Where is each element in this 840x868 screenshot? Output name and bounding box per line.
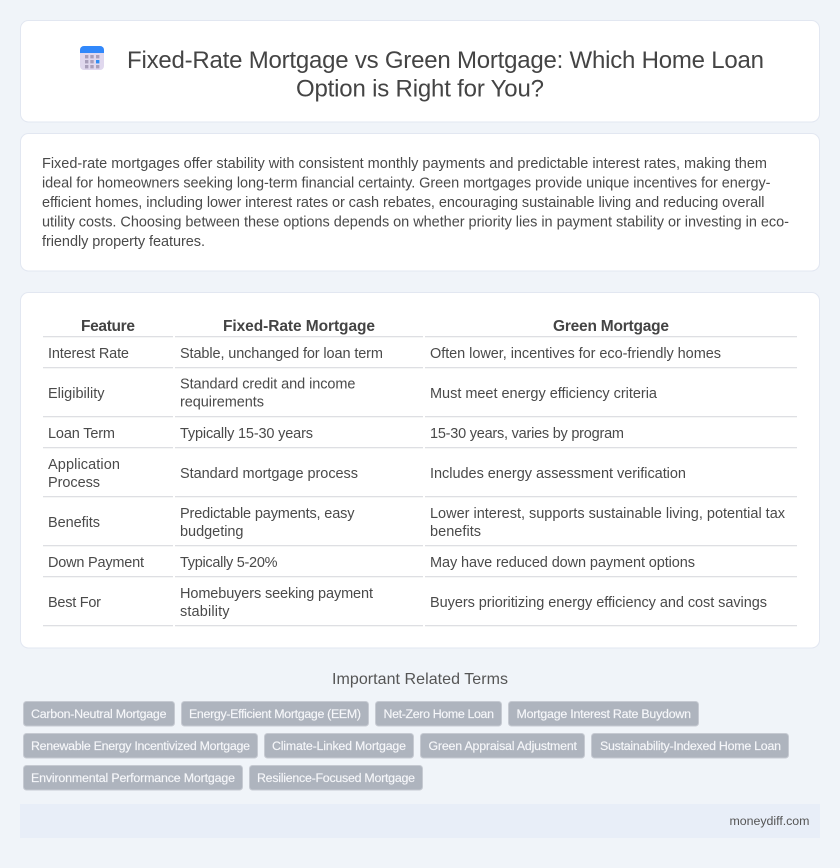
row: application process: Process — [48, 475, 100, 491]
text block: introduction paragraph: Fixed-rate mortgages offer stability with consistent monthly payments and predictable interest rates, making them — [42, 156, 767, 172]
row: loan term: Loan Term — [48, 426, 115, 442]
tag: resilience-focused mortgage: Resilience-Focused Mortgage — [257, 771, 415, 785]
table header row: Fixed-Rate Mortgage — [223, 318, 375, 335]
tag: resilience-focused mortgage — [250, 766, 422, 790]
row: interest rate: Often lower, incentives for eco-friendly homes — [430, 346, 721, 362]
title — [127, 47, 764, 102]
row: application process: Includes energy assessment verification — [430, 466, 686, 482]
row: application process: Standard mortgage process — [180, 466, 358, 482]
row: benefits — [48, 506, 786, 540]
icon: calendar — [80, 46, 104, 70]
title: Option is Right for You? — [296, 76, 544, 102]
tag: mortgage interest rate buydown: Mortgage Interest Rate Buydown — [516, 707, 691, 721]
row: loan term: Typically 15-30 years — [180, 426, 313, 442]
row: down payment: Down Payment — [48, 555, 144, 571]
row: eligibility: requirements — [180, 394, 264, 410]
panel: introduction — [20, 134, 820, 271]
row: down payment — [48, 555, 695, 571]
tag: environmental performance mortgage: Environmental Performance Mortgage — [31, 771, 235, 785]
text block: introduction paragraph — [42, 156, 789, 250]
row: best for: stability — [180, 604, 230, 620]
tag: energy-efficient mortgage — [182, 702, 368, 726]
row: benefits: budgeting — [180, 524, 244, 540]
tag: sustainability-indexed home loan — [592, 734, 788, 758]
tag: climate-linked mortgage: Climate-Linked Mortgage — [272, 739, 406, 753]
row: eligibility — [48, 376, 658, 410]
tag list: related terms — [24, 702, 788, 790]
row: loan term: 15-30 years, varies by program — [430, 426, 624, 442]
tag: renewable energy incentivized mortgage — [24, 734, 258, 758]
table header row: Green Mortgage — [553, 318, 669, 335]
row: eligibility: Must meet energy efficiency criteria — [430, 386, 658, 402]
row: application process: Application — [48, 457, 120, 473]
table header row — [81, 318, 669, 335]
row: best for: Best For — [48, 595, 101, 611]
row: benefits: Lower interest, supports sustainable living, potential tax — [430, 506, 786, 522]
panel: comparison table — [20, 292, 820, 648]
tag: green appraisal adjustment — [420, 734, 584, 758]
row: interest rate: Interest Rate — [48, 346, 129, 362]
tag: sustainability-indexed home loan: Sustainability-Indexed Home Loan — [600, 739, 781, 753]
row: interest rate: Stable, unchanged for loan term — [180, 346, 383, 362]
text block: introduction paragraph: ideal for homeowners seeking long-term financial certainty. Green mortgages provide unique incentives for energy- — [42, 176, 771, 192]
row: loan term — [48, 426, 624, 442]
tag: net-zero home loan — [376, 702, 502, 726]
row: down payment: May have reduced down payment options — [430, 555, 695, 571]
text block: introduction paragraph: utility costs. Choosing between these options depends on whether priority lies in payment stability or investing in eco- — [42, 214, 789, 230]
row: best for: Buyers prioritizing energy efficiency and cost savings — [430, 595, 767, 611]
row: benefits: Predictable payments, easy — [180, 506, 355, 522]
row: best for: Homebuyers seeking payment — [180, 586, 373, 602]
panel: title card — [20, 20, 820, 122]
row: benefits: Benefits — [48, 515, 100, 531]
row: down payment: Typically 5-20% — [180, 555, 278, 571]
tag: net-zero home loan: Net-Zero Home Loan — [384, 707, 494, 721]
tag: mortgage interest rate buydown — [508, 702, 698, 726]
text block: introduction paragraph: efficient homes, including lower interest rates or cash rebates, encouraging sustainable living and reducing overall — [42, 195, 764, 211]
tag: energy-efficient mortgage: Energy-Efficient Mortgage (EEM) — [189, 707, 361, 721]
text block: introduction paragraph: friendly property features. — [42, 234, 205, 250]
tag: green appraisal adjustment: Green Appraisal Adjustment — [428, 739, 578, 753]
title: Fixed-Rate Mortgage vs Green Mortgage: Which Home Loan — [127, 47, 764, 74]
tag: climate-linked mortgage — [264, 734, 414, 758]
row: application process — [48, 457, 686, 491]
tag: carbon-neutral mortgage: Carbon-Neutral Mortgage — [31, 707, 167, 721]
tag: carbon-neutral mortgage — [24, 702, 174, 726]
row: benefits: benefits — [430, 524, 481, 540]
tag: environmental performance mortgage — [24, 766, 242, 790]
tag: renewable energy incentivized mortgage: Renewable Energy Incentivized Mortgage — [31, 739, 250, 753]
row: eligibility: Standard credit and income — [180, 376, 356, 392]
row: interest rate — [48, 346, 721, 362]
footer: moneydiff.com — [730, 814, 810, 828]
row: best for — [48, 586, 767, 620]
footer — [20, 804, 820, 838]
heading: important related terms: Important Related Terms — [332, 671, 508, 688]
table header row: Feature — [81, 318, 135, 335]
row: eligibility: Eligibility — [48, 386, 105, 402]
